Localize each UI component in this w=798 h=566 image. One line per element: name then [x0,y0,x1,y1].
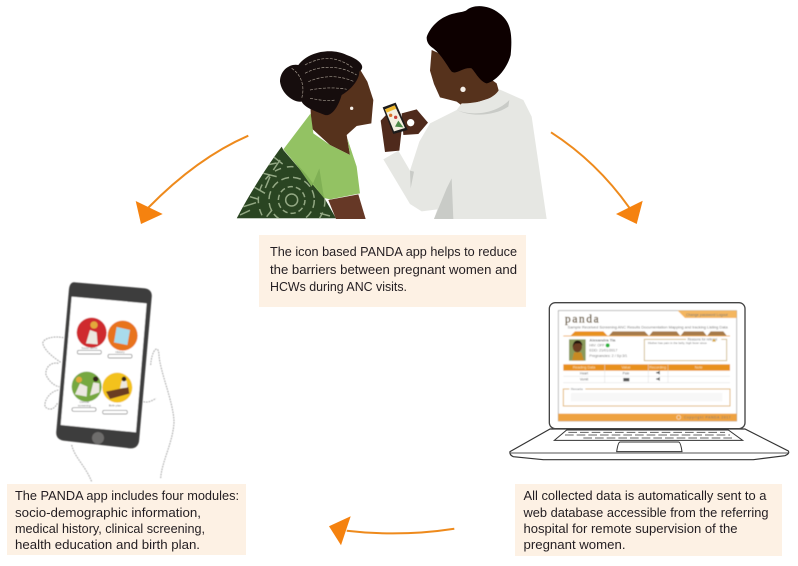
text block: four modules: medical history, clinical screening, [15,521,205,536]
patient details: Alexandra Tia [589,337,616,342]
patient details [589,337,627,358]
data table: Value [621,366,631,370]
arrow: laptop to phone [329,516,454,545]
patient details: Pregnancies: 2 / Sp:3/1 [589,354,627,358]
arrow: illustration to phone [136,136,248,224]
laptop with web database [510,303,789,460]
module: clinical screening: Clinical [80,400,89,404]
left woman skin [310,67,373,155]
left woman hair [280,51,362,115]
phone body [56,282,152,448]
screen: web database interface [558,311,737,421]
data table: Vomit [580,378,588,382]
data table: Recording [649,366,666,370]
navigation menu: Sample Received Screening ANC Results Documentation Mapping and tracking Listing Data [568,325,729,329]
right woman earring [460,87,466,92]
text block: data sent to web database: web database accessible from the referring [523,505,768,520]
data table: Note [695,366,703,370]
text block: four modules [7,484,246,555]
left woman wrap cloth [236,146,336,218]
text block: four modules: The PANDA app includes four modules: [15,488,239,503]
laptop lid [549,303,745,429]
top right tab: Change password Logout [686,313,728,317]
text block: icon based app: HCWs during ANC visits. [270,279,407,294]
patient details: EDD: 21/01/2017 [589,349,617,353]
data table [563,364,730,383]
left woman green shirt [283,113,360,199]
patient details: HIV: OFF [589,343,605,347]
right woman face and neck [430,50,500,107]
phone illustration with app modules [43,282,174,482]
module: socio-demographic: Socio-demo [81,346,98,350]
notes panel [644,337,727,361]
text block: four modules: socio-demographic information, [15,505,201,520]
panda logo: panda [565,313,600,325]
phone held in hand [383,103,408,134]
module: health education and birth plan: Birth plan [109,403,122,407]
data table: Heart [580,371,588,375]
right woman hands [381,109,428,152]
hand outline [43,337,174,482]
text block: data sent to web database: All collected data is automatically sent to a [524,488,767,503]
footer bar: Copyright PANDA 2017 [684,416,731,420]
module: socio-demographic [77,318,107,354]
top right tab [678,311,737,318]
text block: data sent to web database: hospital for remote supervision of the [524,521,738,536]
left woman arm [328,194,366,219]
module: clinical screening [72,372,102,411]
home button [92,432,104,444]
module: medical history: History [115,350,125,354]
module: health education and birth plan [102,373,132,414]
left woman earring [350,107,353,110]
arrow: illustration to laptop [551,132,643,224]
text block: data sent to web database: pregnant women. [524,537,626,552]
right woman white coat [383,89,547,219]
text block: icon based app [259,235,526,307]
comments panel [563,387,730,406]
notes panel: Mother has pain in the belly, high fever since [648,341,707,345]
tabs [571,331,727,336]
module: clinical screening: screening [78,403,91,407]
data table: Pale [623,371,629,375]
laptop base and keyboard [510,429,789,460]
text block: icon based app: The icon based PANDA app helps to reduce [270,244,517,259]
right woman hair [427,6,511,83]
text block: four modules: health education and birth plan. [15,537,200,552]
notes panel: Reasons for referral [688,337,717,341]
illustration: pregnant woman and health care worker with phone [230,6,547,233]
data table: Reading Data [573,366,596,370]
phone screen [61,297,147,432]
footer bar [558,414,737,421]
text block: icon based app: the barriers between pregnant women and [270,262,517,277]
patient photo [569,339,586,361]
module: medical history [108,321,138,358]
text block: data sent to web database [515,484,782,556]
comments panel: Remarks [571,387,583,391]
